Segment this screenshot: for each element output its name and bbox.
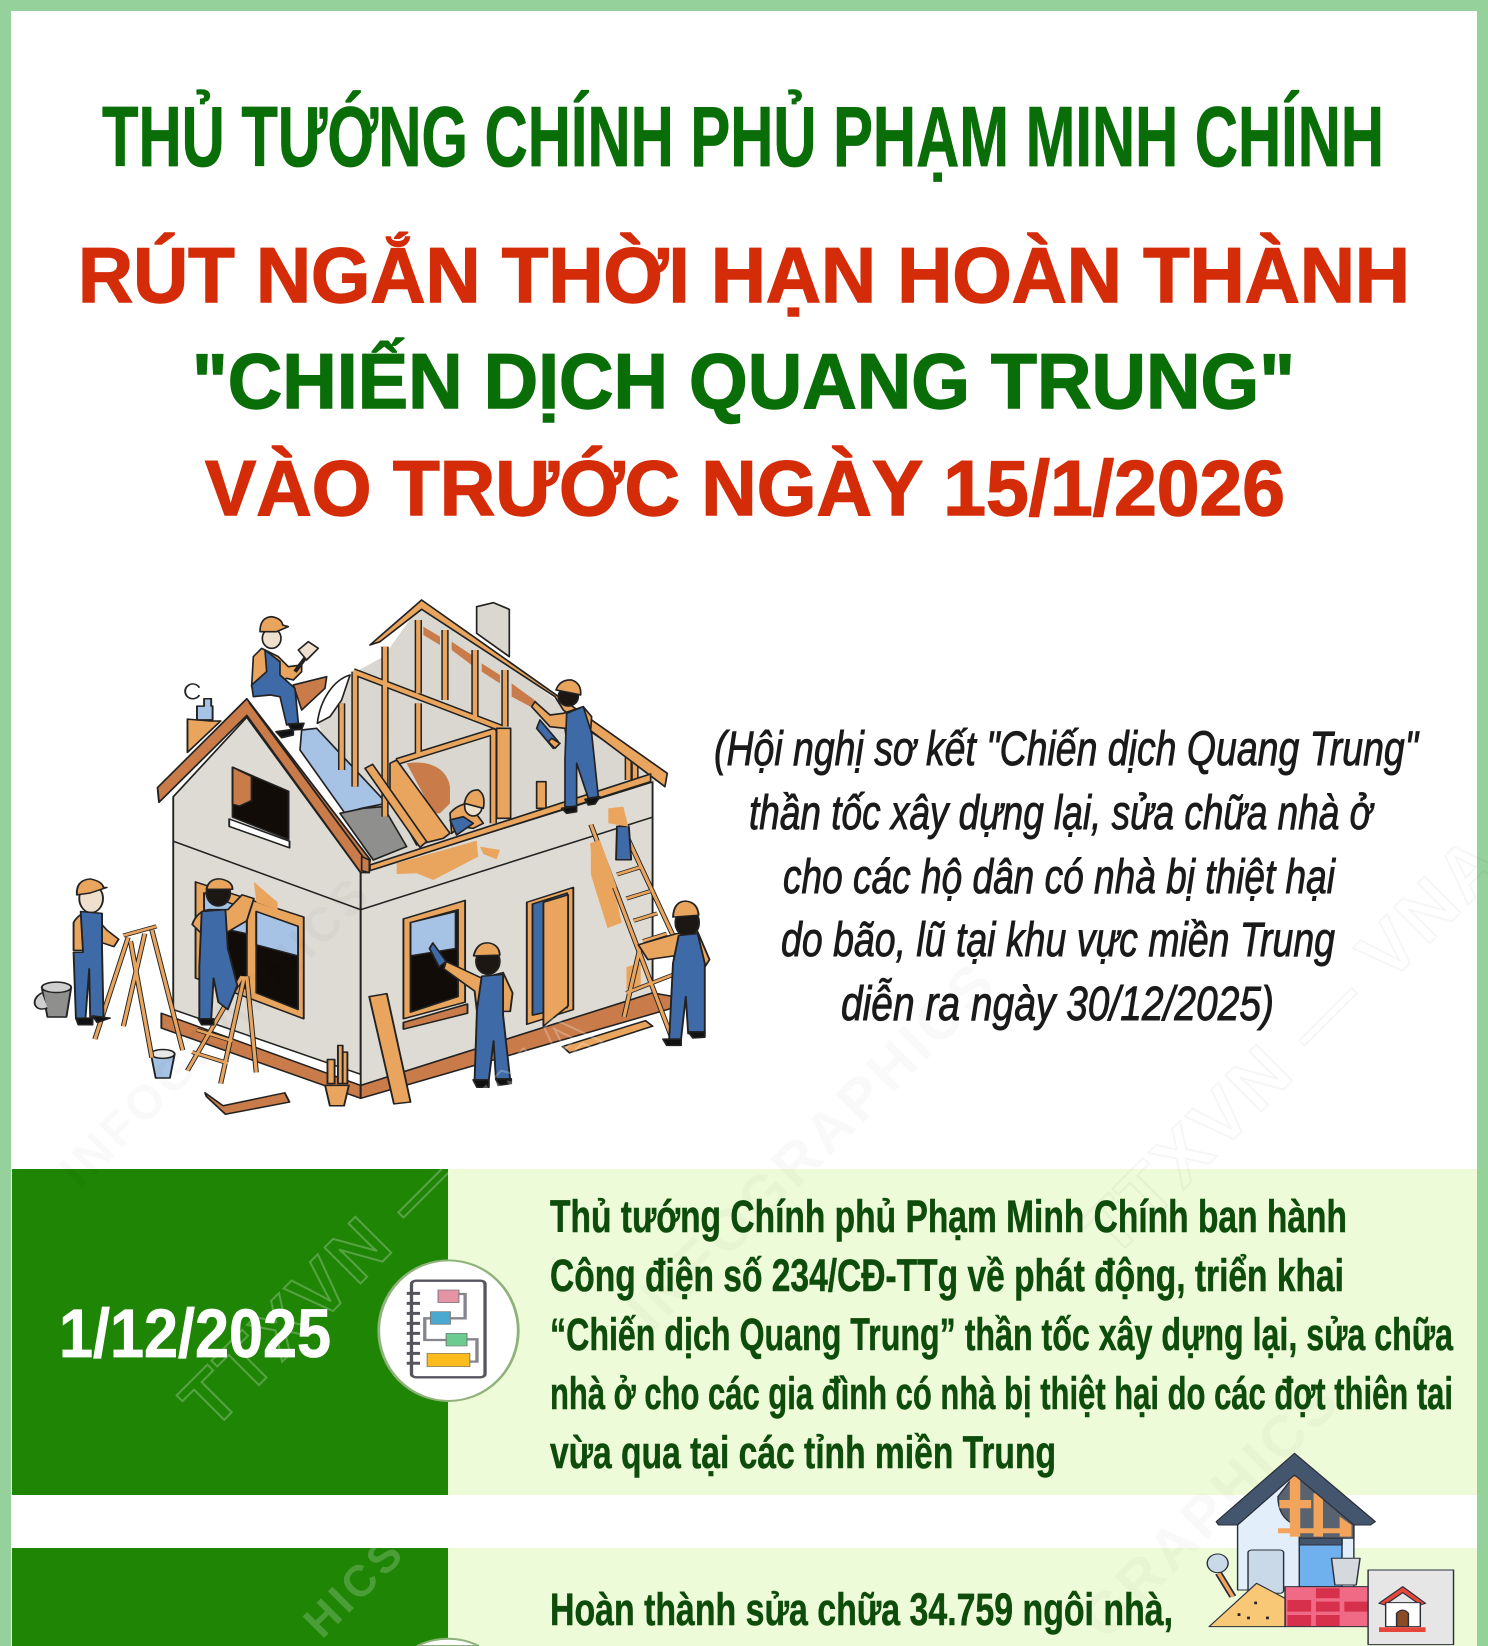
worker sitting on roof: [252, 617, 327, 738]
title: VÀO TRƯỚC NGÀY 15/1/2026: [205, 444, 1285, 532]
row 1 text: [550, 1191, 1454, 1478]
italic note: cho các hộ dân có nhà bị thiệt hại: [783, 851, 1336, 904]
row 2 text: Hoàn thành sửa chữa 34.759 ngôi nhà,: [550, 1584, 1173, 1635]
italic note: diễn ra ngày 30/12/2025): [841, 978, 1274, 1031]
watermark: INFOGRAPHICS: [50, 866, 382, 1198]
date: 1/12/2025: 1/12/2025: [59, 1295, 331, 1372]
title: [78, 89, 1410, 532]
panel: row 2: [12, 1548, 1477, 1646]
watermark: TTXVN — VNA: [165, 990, 618, 1443]
panel: row 1: [12, 1169, 1477, 1495]
lower right window: [403, 900, 467, 1029]
watermark: [50, 818, 1488, 1646]
row 1 text background: [448, 1169, 1477, 1495]
small worker inside: [450, 790, 484, 835]
upper workers and wall plate: [252, 617, 651, 893]
ladders: [95, 815, 674, 1084]
plinth: [161, 993, 674, 1098]
small chimney with can: [185, 684, 221, 752]
left gable wall: [173, 717, 361, 1074]
watermark: HICS: [294, 1527, 415, 1646]
illustration: workers repairing a house: [35, 600, 710, 1114]
worker in front of window: [430, 943, 513, 1087]
row 1 text: vừa qua tại các tỉnh miền Trung: [550, 1427, 1056, 1478]
title: RÚT NGẮN THỜI HẠN HOÀN THÀNH: [78, 231, 1410, 319]
attic window: [229, 767, 290, 848]
roof edge: [158, 699, 370, 873]
watermark: GRAPHICS: [1068, 1366, 1353, 1646]
worker on ladder at window: [192, 879, 254, 1025]
worker by ladder: [638, 901, 710, 1045]
row 2 icon circle: [417, 1639, 479, 1646]
wall plate with damage patches: [362, 774, 651, 893]
planks and tools: [35, 982, 653, 1114]
right wall: [361, 782, 653, 1085]
row 2 text background: [448, 1548, 1477, 1646]
italic note: do bão, lũ tại khu vực miền Trung: [781, 914, 1335, 967]
row 1 date block: [12, 1169, 448, 1495]
watermark: INFOGRAPHICS: [615, 949, 1010, 1343]
lower left window: [196, 882, 304, 1019]
door: [527, 887, 573, 1026]
worker on top of wall: [532, 680, 600, 813]
worker on left with sawhorse: [74, 879, 119, 1025]
icon circle with notebook: [379, 1260, 518, 1401]
title: "CHIẾN DỊCH QUANG TRUNG": [192, 337, 1295, 425]
icon: house under repair: [1207, 1453, 1454, 1645]
upper frame behind walls: [300, 600, 667, 870]
house body: [35, 684, 710, 1114]
italic note: [714, 723, 1420, 1031]
row 2 date block: [12, 1548, 448, 1646]
